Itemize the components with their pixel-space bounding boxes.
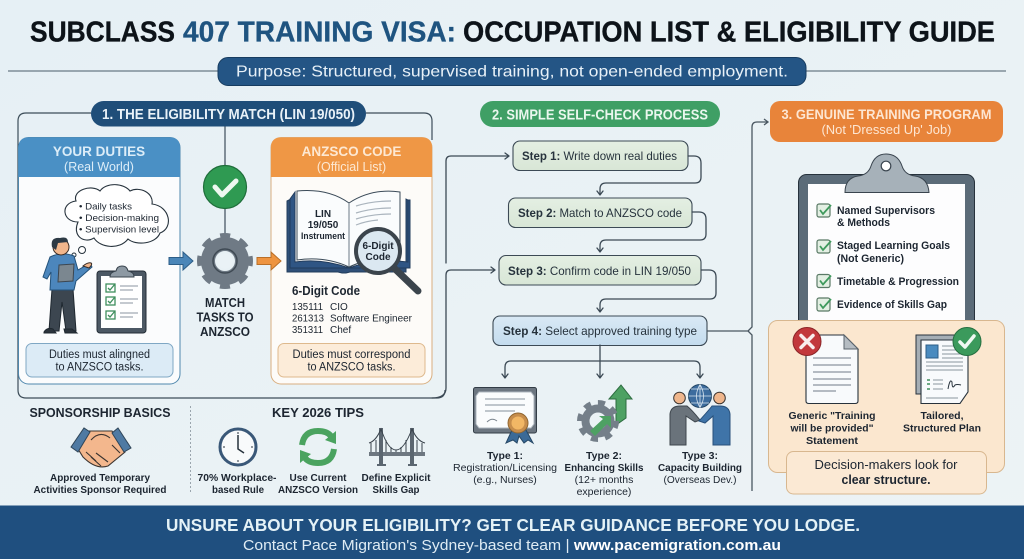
panel: your duties [18, 138, 180, 384]
callout: anzsco: to ANZSCO tasks. [308, 362, 396, 374]
icon: thought cloud: • Decision-making [79, 213, 159, 224]
step 3 [499, 256, 701, 285]
panel: sponsorship basics: Activities Sponsor Required [34, 484, 166, 496]
checklist: Timetable & Progression [837, 276, 959, 288]
label: match tasks: MATCH [205, 296, 245, 310]
icon: thought cloud [65, 185, 168, 257]
icon: bridge [369, 428, 425, 465]
checklist: (Not Generic) [837, 253, 904, 265]
panel: eligibility match frame [18, 113, 445, 398]
callout: duties: to ANZSCO tasks. [56, 362, 144, 374]
title: 407 TRAINING VISA: [183, 16, 456, 48]
icon: clock [220, 429, 256, 465]
text block: 6-digit code list: 6-Digit Code [292, 284, 360, 298]
label: match tasks [196, 296, 254, 339]
panel: type 2: Type 2: [586, 450, 622, 462]
arrow: step 4 to section 3 [707, 119, 768, 491]
label: match tasks: TASKS TO [196, 310, 254, 324]
panel: type 1 [453, 388, 557, 486]
title: SUBCLASS [30, 16, 175, 48]
panel: type 2: (12+ months [575, 474, 633, 486]
checklist: & Methods [837, 217, 890, 229]
panel: key 2026 tips: Define Explicit [362, 472, 431, 484]
title: OCCUPATION LIST & ELIGIBILITY GUIDE [463, 16, 995, 48]
panel: sponsorship basics: Approved Temporary [50, 472, 150, 484]
footer banner: Contact Pace Migration's Sydney-based team | www.pacemigration.com.au [243, 538, 781, 554]
panel: generic vs tailored comparison [768, 320, 1004, 472]
arrow: step 1 to 2 [597, 156, 701, 195]
step 2: Step 2: Match to ANZSCO code [518, 206, 682, 220]
panel: anzsco code: (Official List) [317, 160, 386, 174]
panel: type 1: Type 1: [487, 450, 523, 462]
text block: 6-digit code list: 261313 [292, 314, 324, 324]
step 3: Step 3: Confirm code in LIN 19/050 [508, 264, 691, 278]
arrow: step 4 branching to types [502, 345, 703, 378]
panel: type 3: Type 3: [682, 450, 718, 462]
panel: your duties: YOUR DUTIES [53, 144, 145, 159]
arrow: step 3 to 4 [597, 270, 716, 312]
panel: generic vs tailored comparison: will be provided" [790, 422, 874, 434]
title [30, 16, 995, 48]
heading: genuine training program: 3. GENUINE TRAINING PROGRAM [782, 106, 992, 122]
text block: 6-digit code list [292, 284, 413, 336]
panel: type 2 [564, 385, 644, 498]
text block: 6-digit code list: Software Engineer [330, 314, 413, 324]
heading: eligibility match: 1. THE ELIGIBILITY MATCH (LIN 19/050) [102, 107, 355, 123]
icon: clipboard clip [845, 154, 929, 192]
icon: tailored document [916, 328, 981, 404]
panel: key 2026 tips: Skills Gap [372, 484, 420, 496]
panel: key 2026 tips: 70% Workplace- [198, 472, 277, 484]
heading: self-check process: 2. SIMPLE SELF-CHECK PROCESS [492, 108, 708, 124]
panel: generic vs tailored comparison: Statement [806, 435, 859, 447]
panel: key 2026 tips: ANZSCO Version [278, 484, 358, 496]
label: match tasks: ANZSCO [200, 325, 250, 339]
footer banner [0, 506, 1024, 559]
icon: matching gear [201, 237, 249, 285]
callout: duties: Duties must alingned [49, 349, 150, 361]
icon: thought cloud: • Daily tasks [79, 202, 132, 212]
icon: open book with magnifier: Instrument [301, 231, 346, 242]
callout: decision-makers [786, 452, 986, 494]
panel: key 2026 tips: Use Current [290, 472, 347, 484]
heading: eligibility match [91, 101, 366, 126]
panel: your duties: (Real World) [64, 160, 134, 174]
step 4: Step 4: Select approved training type [503, 324, 697, 338]
purpose banner: Purpose: Structured, supervised training, not open-ended employment. [236, 64, 788, 80]
checklist: Named Supervisors [837, 205, 935, 217]
checklist: Evidence of Skills Gap [837, 299, 947, 311]
panel: generic vs tailored comparison: Structured Plan [903, 422, 981, 434]
panel: anzsco code [271, 138, 432, 384]
checklist: Staged Learning Goals [837, 240, 950, 252]
icon: duties clipboard [97, 266, 146, 333]
callout: decision-makers: clear structure. [842, 473, 930, 487]
icon: handshake [71, 428, 131, 467]
icon: open book with magnifier: Code [366, 252, 391, 263]
panel: sponsorship basics: SPONSORSHIP BASICS [30, 405, 171, 420]
heading: genuine training program [770, 101, 1003, 142]
panel: training clipboard [798, 154, 974, 334]
icon: open book with magnifier: LIN [315, 209, 331, 220]
icon: open book with magnifier [287, 190, 418, 291]
panel: anzsco code: ANZSCO CODE [302, 144, 401, 159]
step 4 [493, 316, 707, 346]
text block: 6-digit code list: 351311 [292, 325, 323, 336]
panel: generic vs tailored comparison: Generic "Training [788, 410, 876, 422]
callout: duties [26, 344, 173, 377]
icon: open book with magnifier: 6-Digit [362, 241, 394, 252]
panel: type 1: (e.g., Nurses) [473, 474, 537, 486]
panel: sponsorship basics [30, 405, 171, 496]
text block: 6-digit code list: CIO [330, 302, 348, 313]
icon: people and globe [670, 384, 730, 445]
text block: 6-digit code list: 135111 [292, 302, 323, 313]
icon: generic document [793, 328, 858, 404]
callout: decision-makers: Decision-makers look for [814, 458, 958, 472]
panel: key 2026 tips: based Rule [212, 484, 264, 496]
arrow: feedback bracket to steps [432, 153, 509, 398]
purpose banner [8, 58, 1006, 86]
heading: self-check process [480, 101, 720, 127]
checklist [817, 204, 959, 311]
panel: generic vs tailored comparison: Tailored, [920, 410, 964, 422]
text block: 6-digit code list: Chef [330, 325, 351, 336]
panel: type 3: Capacity Building [658, 462, 742, 474]
panel: type 2: Enhancing Skills [564, 462, 644, 474]
arrow: step 2 to 3 [597, 212, 706, 252]
panel: type 3: (Overseas Dev.) [664, 474, 736, 486]
icon: certificate [474, 388, 536, 443]
panel: type 1: Registration/Licensing [453, 462, 557, 474]
panel: type 2: experience) [577, 486, 631, 498]
callout: anzsco [278, 344, 425, 377]
icon: person with tablet [43, 238, 92, 333]
step 1: Step 1: Write down real duties [522, 149, 677, 163]
panel: key 2026 tips [198, 405, 431, 496]
icon: refresh arrows [300, 431, 336, 463]
arrow: gear to anzsco [257, 252, 281, 270]
step 1 [513, 141, 688, 170]
icon: thought cloud: • Supervision level [79, 224, 159, 236]
callout: anzsco: Duties must correspond [292, 349, 410, 361]
arrow: duties to gear [169, 252, 193, 270]
icon: gear with growth arrow [580, 385, 632, 439]
heading: genuine training program: (Not 'Dressed Up' Job) [822, 123, 952, 137]
step 2 [508, 198, 692, 228]
footer banner: UNSURE ABOUT YOUR ELIGIBILITY? GET CLEAR GUIDANCE BEFORE YOU LODGE. [166, 515, 860, 535]
panel: key 2026 tips: KEY 2026 TIPS [272, 405, 364, 420]
icon: green check [204, 166, 246, 208]
icon: open book with magnifier: 19/050 [308, 220, 339, 231]
panel: type 3 [658, 384, 742, 486]
